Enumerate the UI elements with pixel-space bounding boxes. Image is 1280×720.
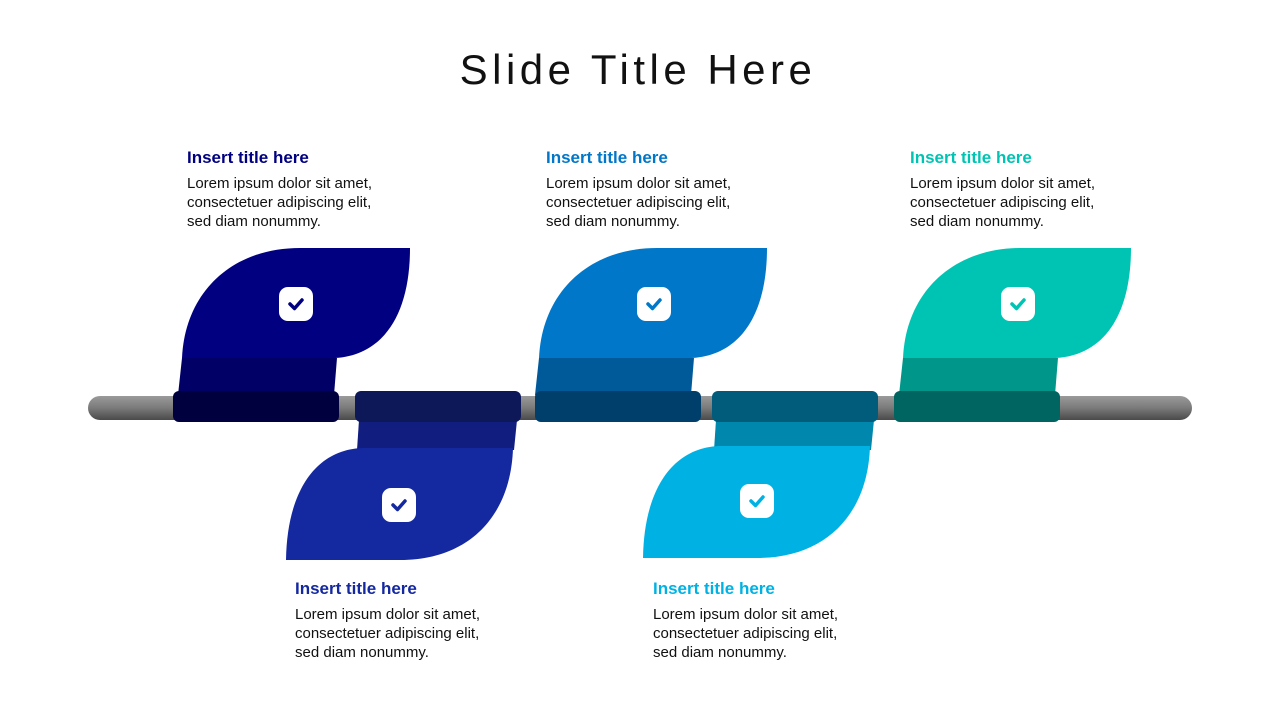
text: step 4: Lorem ipsum dolor sit amet, bbox=[653, 606, 838, 623]
text: step 2 bbox=[295, 579, 480, 661]
text: step 1: sed diam nonummy. bbox=[187, 213, 321, 230]
text: step 5: sed diam nonummy. bbox=[910, 213, 1044, 230]
title: Slide Title Here bbox=[460, 46, 816, 93]
text: step 3: consectetuer adipiscing elit, bbox=[546, 194, 730, 211]
text: step 5: Insert title here bbox=[910, 148, 1032, 167]
step 1 shape bbox=[173, 248, 410, 422]
text: step 3: Insert title here bbox=[546, 148, 668, 167]
bar bbox=[88, 396, 1192, 420]
text: step 2: Insert title here bbox=[295, 579, 417, 598]
text: step 1 bbox=[187, 148, 372, 230]
text: step 5: Lorem ipsum dolor sit amet, bbox=[910, 175, 1095, 192]
text: step 4: consectetuer adipiscing elit, bbox=[653, 625, 837, 642]
text: step 3: Lorem ipsum dolor sit amet, bbox=[546, 175, 731, 192]
text: step 4: Insert title here bbox=[653, 579, 775, 598]
text: step 3: sed diam nonummy. bbox=[546, 213, 680, 230]
text: step 1: consectetuer adipiscing elit, bbox=[187, 194, 371, 211]
text: step 2: consectetuer adipiscing elit, bbox=[295, 625, 479, 642]
text: step 2: Lorem ipsum dolor sit amet, bbox=[295, 606, 480, 623]
text: step 1: Lorem ipsum dolor sit amet, bbox=[187, 175, 372, 192]
step 2 shape bbox=[286, 391, 521, 560]
text: step 1: Insert title here bbox=[187, 148, 309, 167]
text: step 4 bbox=[653, 579, 838, 661]
text: step 2: sed diam nonummy. bbox=[295, 644, 429, 661]
step 5 shape bbox=[894, 248, 1131, 422]
text: step 5 bbox=[910, 148, 1095, 230]
text: step 5: consectetuer adipiscing elit, bbox=[910, 194, 1094, 211]
step 4 shape bbox=[643, 391, 878, 558]
step 3 shape bbox=[535, 248, 767, 422]
text: step 3 bbox=[546, 148, 731, 230]
text: step 4: sed diam nonummy. bbox=[653, 644, 787, 661]
